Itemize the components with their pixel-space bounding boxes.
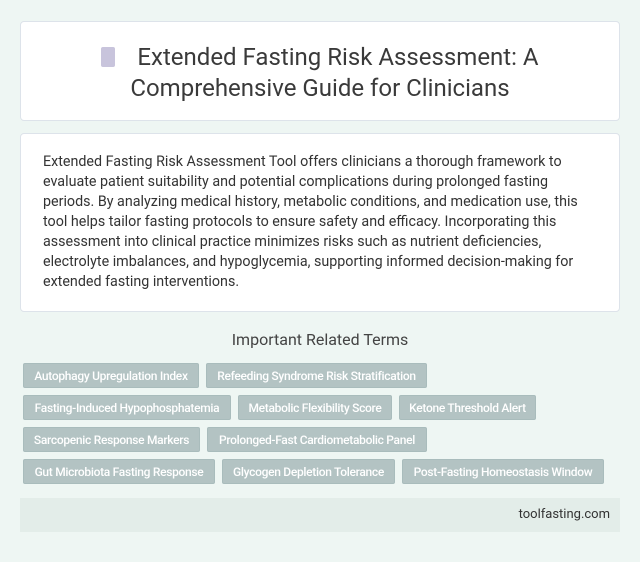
description card (20, 133, 620, 312)
tag (23, 459, 215, 484)
description text: Extended Fasting Risk Assessment Tool offers clinicians a thorough framework to evaluate patient suitability and potential complications during prolonged fasting periods. By analyzing medical history, metabolic conditions, and medication use, this tool helps tailor fasting protocols to ensure safety and efficacy. Incorporating this assessment into clinical practice minimizes risks such as nutrient deficiencies, electrolyte imbalances, and hypoglycemia, supporting informed decision-making for extended fasting interventions. (43, 154, 578, 290)
tag: Post-Fasting Homeostasis Window (414, 465, 592, 479)
tag: Ketone Threshold Alert (409, 401, 526, 415)
tag (23, 395, 231, 420)
related terms heading: Important Related Terms (232, 330, 408, 349)
tag (238, 395, 392, 420)
tag: Gut Microbiota Fasting Response (35, 465, 203, 479)
tag: Prolonged-Fast Cardiometabolic Panel (219, 433, 415, 447)
tag (402, 459, 604, 484)
tag (206, 363, 427, 388)
tag: Refeeding Syndrome Risk Stratification (217, 369, 416, 383)
icon: document (101, 47, 115, 67)
tag (23, 363, 199, 388)
title: Comprehensive Guide for Clinicians (130, 74, 510, 102)
tag: Autophagy Upregulation Index (34, 369, 188, 383)
footer (20, 498, 620, 532)
tag: Fasting-Induced Hypophosphatemia (35, 401, 219, 415)
title: Extended Fasting Risk Assessment: A (137, 43, 539, 71)
tag: Glycogen Depletion Tolerance (233, 465, 384, 479)
footer domain: toolfasting.com (519, 507, 610, 522)
header card (20, 21, 620, 121)
tag (207, 427, 427, 452)
title (101, 43, 539, 102)
tag: Sarcopenic Response Markers (34, 433, 189, 447)
tag (23, 427, 200, 452)
tag (399, 395, 536, 420)
tag (222, 459, 395, 484)
tag: Metabolic Flexibility Score (248, 401, 382, 415)
